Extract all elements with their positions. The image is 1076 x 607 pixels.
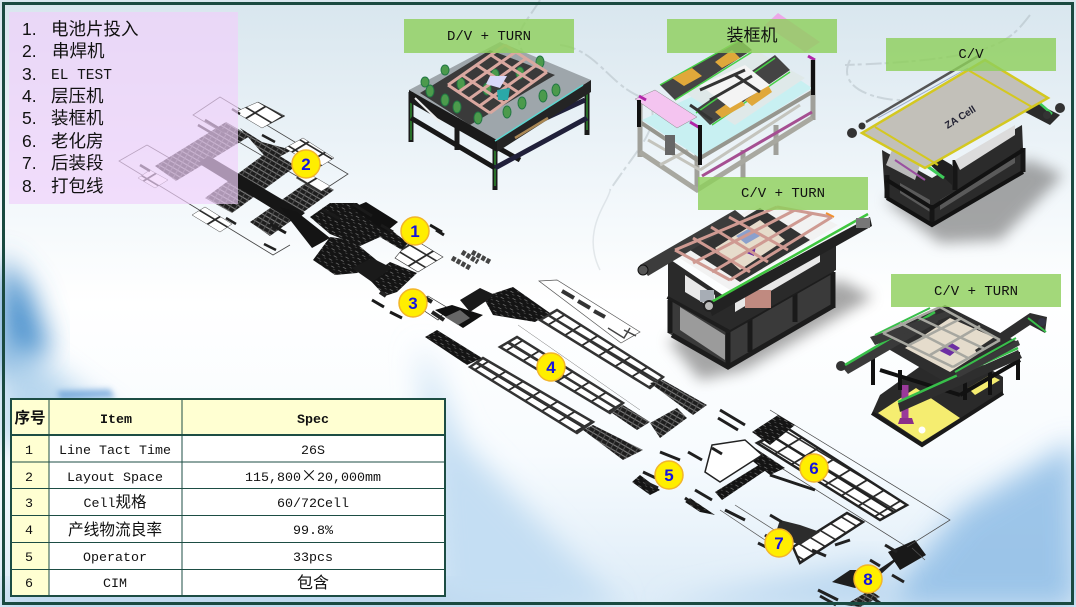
label: C/V + TURN centre: C/V + TURN — [741, 186, 825, 202]
floor plan: section 2 stringer — [119, 97, 348, 255]
machine: C/V conveyor: ZA Cell — [943, 104, 978, 132]
spec table: 3 — [25, 497, 33, 512]
numbered badges: 5 — [664, 466, 674, 485]
process list: 串焊机 — [52, 41, 105, 61]
process list: 后装段 — [51, 153, 104, 173]
numbered badges: 6 — [809, 459, 819, 478]
spec table: Line Tact Time — [59, 444, 171, 459]
spec table: 99.8% — [293, 524, 333, 539]
numbered badges — [292, 150, 882, 593]
spec table: 26S — [301, 444, 325, 459]
spec table: 4 — [25, 524, 33, 539]
process list: 老化房 — [51, 131, 104, 151]
machine: D/V + TURN — [409, 42, 591, 190]
spec table: Spec — [297, 413, 329, 428]
label: C/V: C/V — [958, 47, 984, 63]
spec table: CIM — [103, 577, 127, 592]
spec table: 5 — [25, 551, 33, 566]
process list: 1. — [22, 19, 37, 39]
numbered badges: 2 — [301, 155, 311, 174]
numbered badges: 1 — [410, 222, 420, 241]
numbered badges: 4 — [546, 358, 556, 377]
label: C/V — [886, 38, 1056, 71]
spec table: Cell规格 — [83, 493, 147, 512]
label: frame mounter: 装框机 — [726, 26, 778, 47]
machine: C/V + TURN right — [836, 305, 1047, 445]
spec table: Layout Space — [67, 471, 163, 486]
numbered badges: 7 — [774, 534, 784, 553]
floor plan: section 1 and 3 — [270, 202, 448, 320]
process list — [22, 19, 138, 196]
numbered badges: 8 — [863, 570, 873, 589]
machine: C/V + TURN centre — [638, 195, 872, 367]
process list: 7. — [22, 153, 37, 173]
label: D/V + TURN — [404, 19, 574, 53]
spec table: 33pcs — [293, 551, 333, 566]
machine: C/V conveyor — [847, 55, 1065, 225]
spec table: Item — [100, 413, 132, 428]
spec table — [11, 399, 445, 596]
spec table: 产线物流良率 — [68, 521, 162, 540]
process list: 3. — [22, 64, 37, 84]
spec table: 60/72Cell — [277, 497, 349, 512]
floor plan: sections 5 to 8 — [632, 410, 950, 607]
spec table: 6 — [25, 577, 33, 592]
process list: 5. — [22, 108, 37, 128]
floor plan: section 4 laminator — [425, 252, 707, 460]
label: D/V + TURN: D/V + TURN — [447, 29, 531, 45]
process list: 装框机 — [51, 108, 104, 128]
process list: 8. — [22, 176, 37, 196]
process list: 2. — [22, 41, 37, 61]
spec table: Operator — [83, 551, 147, 566]
label: C/V + TURN centre — [698, 177, 868, 210]
label: C/V + TURN right: C/V + TURN — [934, 284, 1018, 300]
process list: 6. — [22, 131, 37, 151]
process list: 4. — [22, 86, 37, 106]
process list: EL TEST — [51, 68, 112, 84]
machine: frame mounter — [635, 13, 820, 190]
machine shadows — [668, 160, 1063, 380]
numbered badges: 3 — [408, 294, 418, 313]
label: frame mounter — [667, 19, 837, 53]
spec table: 包含 — [297, 574, 329, 593]
process list: 打包线 — [51, 176, 104, 196]
process list: 层压机 — [51, 86, 104, 106]
spec table: 115,800×20,000mm — [245, 462, 381, 486]
label: C/V + TURN right — [891, 274, 1061, 307]
spec table: 1 — [25, 444, 33, 459]
panel: process list background — [9, 12, 238, 204]
spec table: 序号 — [14, 408, 46, 428]
process list: 电池片投入 — [51, 19, 138, 39]
spec table: 2 — [25, 471, 33, 486]
